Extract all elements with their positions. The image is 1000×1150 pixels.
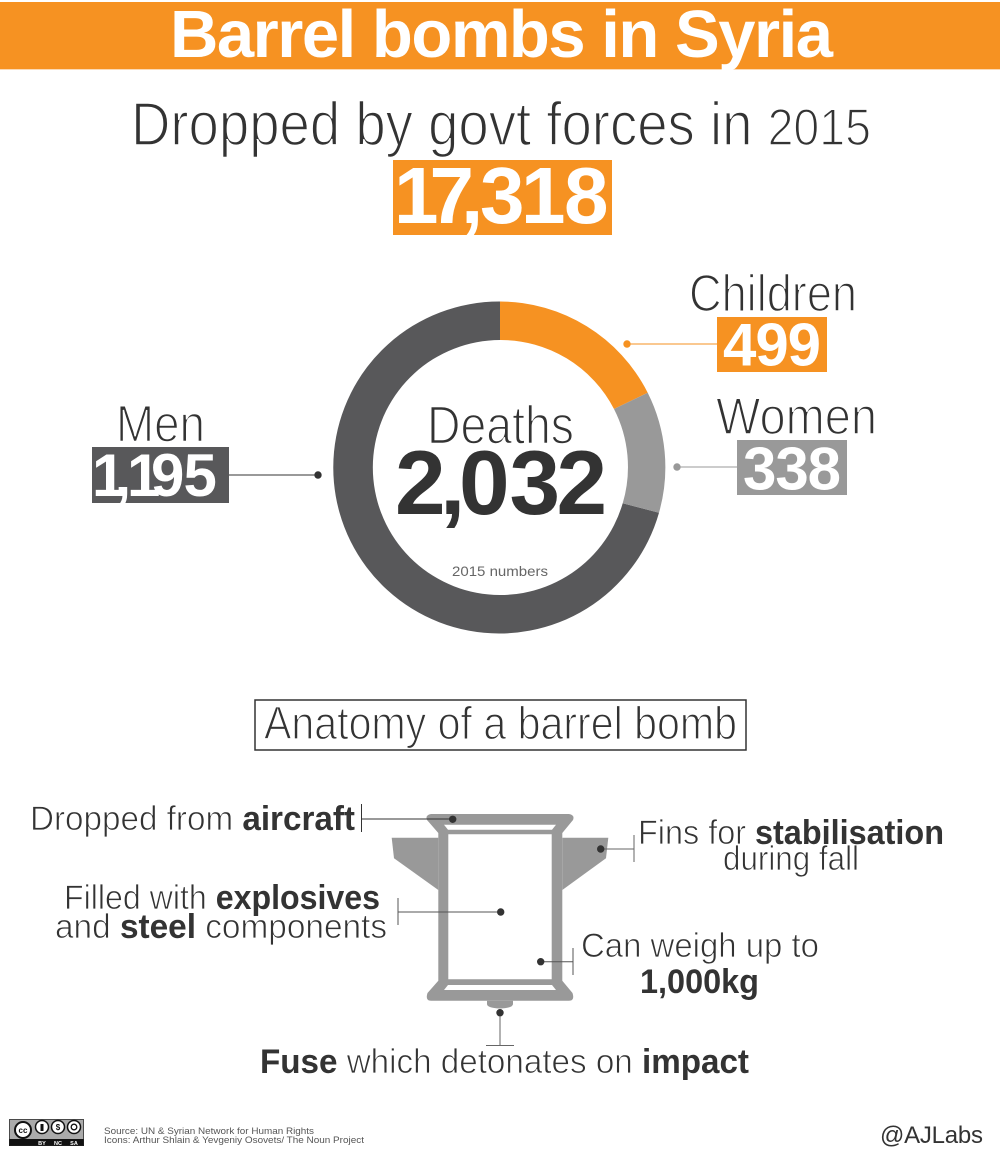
donut total: 2,032 [395, 433, 607, 534]
creative commons badge: NC [54, 1141, 62, 1147]
pointer: fuse [486, 1009, 514, 1046]
label: fuse: Fuse which detonates on impact [260, 1043, 749, 1081]
left fin [392, 838, 438, 890]
creative commons badge: cc [19, 1126, 28, 1135]
heading: dropped by govt forces: Dropped by govt forces in 2015 [131, 90, 871, 158]
label: dropped from aircraft: Dropped from aircraft [30, 800, 355, 838]
source credits: Icons: Arthur Shlain & Yevgeniy Osovets/ The Noun Project [104, 1135, 364, 1146]
right fin [562, 838, 608, 890]
barrel bomb diagram [392, 814, 608, 1008]
label: weight [581, 927, 819, 1001]
label: weight: 1,000kg [640, 963, 759, 1001]
callout: women [673, 388, 877, 502]
callout: children: 499 [723, 312, 821, 378]
donut label: deaths: Deaths [427, 396, 574, 456]
label: weight: Can weigh up to [581, 927, 819, 965]
label: explosives: Filled with explosives [64, 879, 380, 917]
callout: children: Children [689, 265, 857, 323]
AJLabs handle: @AJLabs [880, 1122, 983, 1149]
source credits: Source: UN & Syrian Network for Human Rights [104, 1126, 314, 1137]
total barrel bombs number: 17,318 [394, 151, 608, 240]
callout: men: Men [116, 396, 205, 454]
pointer: explosives [398, 898, 504, 925]
callout: women: Women [716, 388, 877, 446]
section heading: anatomy: Anatomy of a barrel bomb [264, 697, 737, 749]
label: fins [638, 814, 944, 878]
callout: children [623, 265, 857, 378]
label: explosives: and steel components [55, 908, 387, 946]
label: fins: during fall [723, 840, 859, 878]
segment: men [333, 301, 659, 633]
callout: men: 1,195 [92, 442, 217, 509]
callout: men [92, 396, 322, 509]
creative commons badge: SA [70, 1141, 78, 1147]
donut chart: deaths [333, 301, 665, 633]
creative commons badge [9, 1119, 84, 1147]
fuse [487, 1001, 513, 1008]
donut note: 2015 numbers [452, 563, 548, 579]
label: fins: Fins for stabilisation [638, 814, 944, 852]
segment: women [614, 393, 665, 513]
source credits [104, 1126, 364, 1146]
title banner [0, 0, 1000, 72]
callout: women: 338 [743, 436, 841, 502]
label: explosives [55, 879, 387, 946]
pointer: aircraft [362, 804, 456, 832]
pointer: weight [537, 948, 573, 975]
creative commons badge: BY [38, 1141, 46, 1147]
creative commons badge: $ [56, 1123, 61, 1132]
bomb body [426, 814, 574, 1001]
pointer: fins [597, 835, 634, 862]
segment: children [500, 302, 648, 409]
